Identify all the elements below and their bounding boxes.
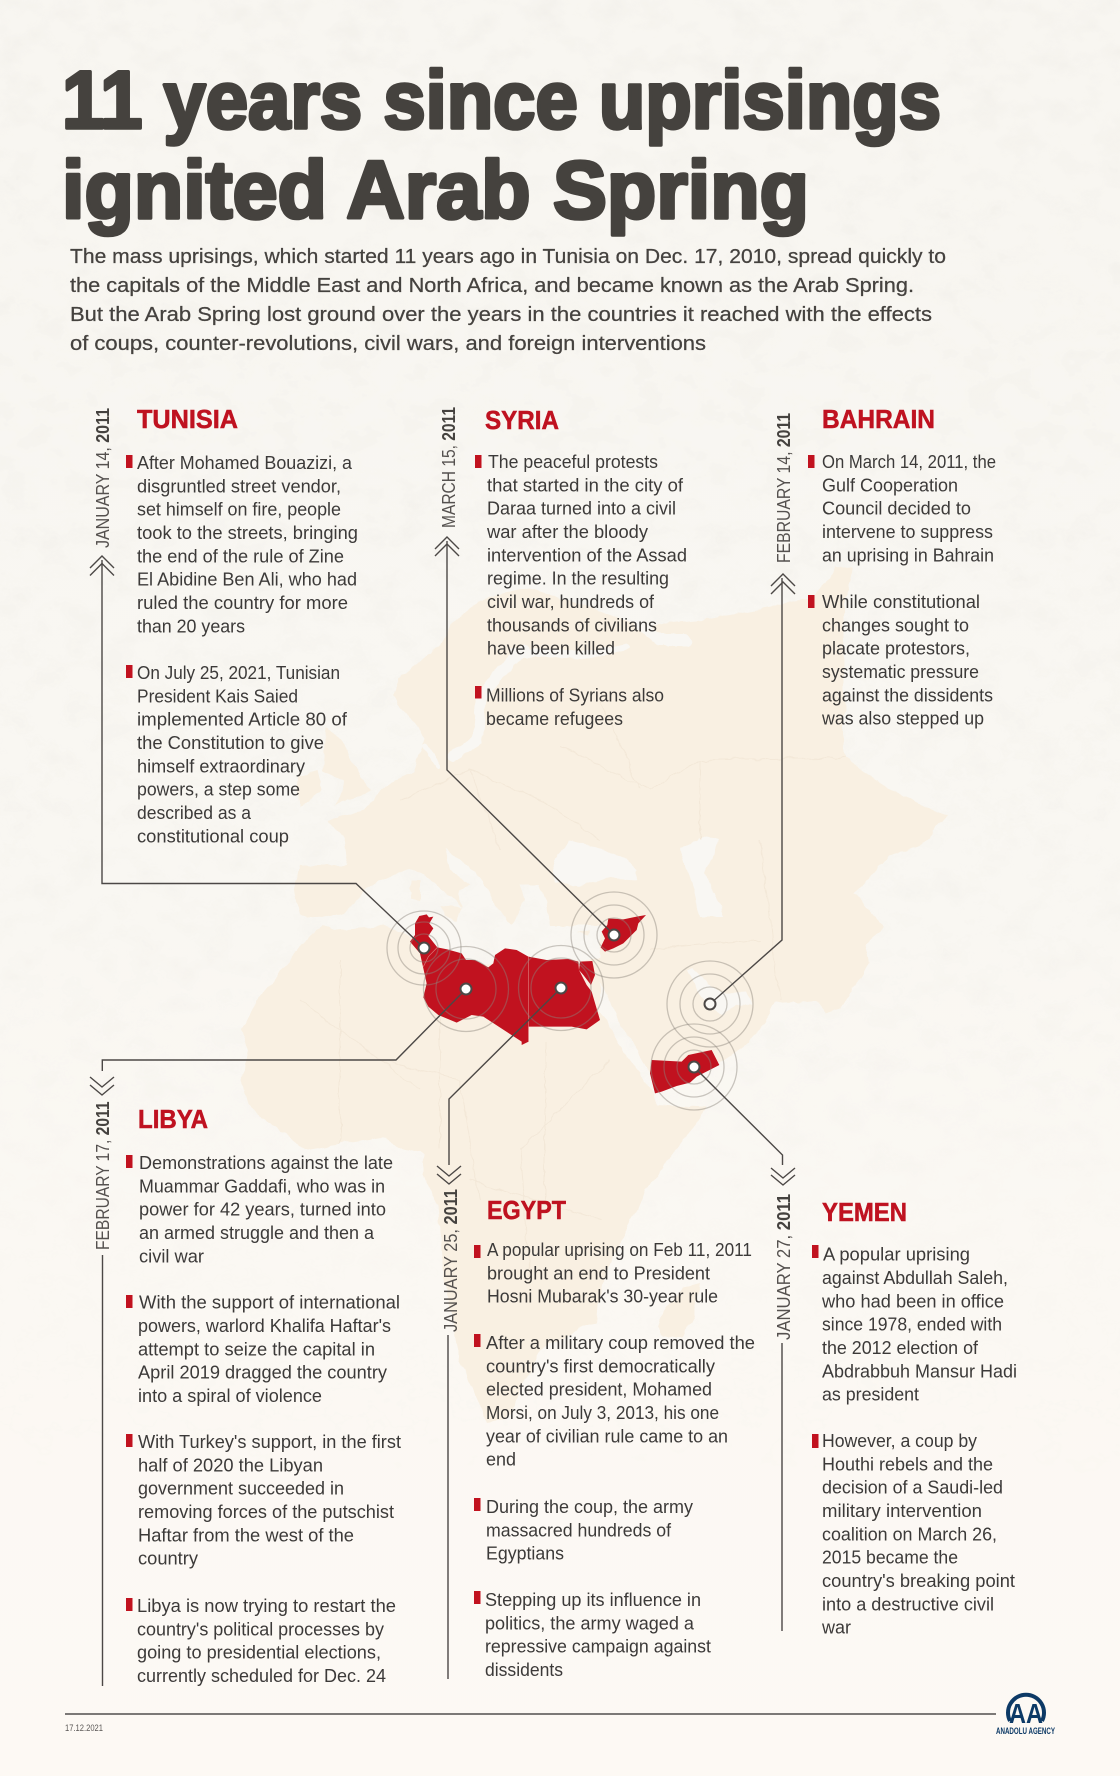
intro text: The mass uprisings, which started 11 years ago in Tunisia on Dec. 17, 2010, spread quickly to xyxy=(70,246,946,268)
text block: into a spiral of violence xyxy=(138,1385,322,1406)
text block: intervention of the Assad xyxy=(487,544,687,565)
text block: government succeeded in xyxy=(138,1478,344,1499)
text block: elected president, Mohamed xyxy=(486,1379,712,1400)
text block: repressive campaign against xyxy=(485,1636,711,1657)
text block: removing forces of the putschist xyxy=(138,1501,394,1522)
text block xyxy=(808,451,996,565)
text block: himself extraordinary xyxy=(137,755,306,776)
paper background xyxy=(11,0,1120,694)
text block: end xyxy=(486,1449,516,1470)
text block: since 1978, ended with xyxy=(822,1314,1002,1335)
text block: Demonstrations against the late xyxy=(139,1152,393,1173)
text block: changes sought to xyxy=(822,614,969,635)
text block: April 2019 dragged the country xyxy=(138,1362,388,1383)
arrow: Libya connector xyxy=(90,984,472,1686)
highlighted countries xyxy=(410,914,719,1093)
text block: powers, a step some xyxy=(137,779,300,800)
text block: civil war xyxy=(139,1245,204,1266)
text block xyxy=(126,1152,393,1266)
world map xyxy=(242,567,949,1423)
text block xyxy=(474,1239,752,1307)
text block xyxy=(812,1430,1015,1638)
text block xyxy=(474,1496,694,1564)
logo: Anadolu Agency: ANADOLU AGENCY xyxy=(996,1726,1055,1736)
panel: Yemen xyxy=(688,1062,1017,1638)
text block: as president xyxy=(822,1384,919,1405)
text block: Hosni Mubarak's 30-year rule xyxy=(487,1286,718,1307)
footer rule and date: 17.12.2021 xyxy=(65,1723,103,1733)
text block: 2015 became the xyxy=(822,1547,958,1568)
logo: Anadolu Agency: AA xyxy=(1009,1698,1043,1729)
text block xyxy=(474,1332,755,1470)
heading: BAHRAIN xyxy=(822,406,935,434)
text block: Morsi, on July 3, 2013, his one xyxy=(486,1402,719,1423)
text block: El Abidine Ben Ali, who had xyxy=(137,569,357,590)
text block: took to the streets, bringing xyxy=(137,522,358,543)
text block: an uprising in Bahrain xyxy=(822,544,994,565)
text block: than 20 years xyxy=(137,615,245,636)
arrow: Bahrain connector xyxy=(704,574,795,1010)
text block: decision of a Saudi-led xyxy=(822,1477,1003,1498)
text block: against Abdullah Saleh, xyxy=(822,1267,1008,1288)
arrow: Tunisia connector xyxy=(90,556,430,954)
title: 11 years since uprisings xyxy=(62,55,941,146)
text block: who had been in office xyxy=(821,1290,1004,1311)
text block: After a military coup removed the xyxy=(486,1332,755,1353)
text block: the end of the rule of Zine xyxy=(137,545,344,566)
text block xyxy=(126,452,358,636)
panel: Bahrain xyxy=(704,406,996,1010)
text block: placate protestors, xyxy=(822,638,970,659)
date: MARCH 15, 2011 xyxy=(438,407,459,528)
location rings xyxy=(387,892,753,1110)
text block: became refugees xyxy=(486,708,623,729)
text block xyxy=(126,1595,396,1686)
text block xyxy=(812,1244,1017,1405)
text block: constitutional coup xyxy=(137,825,289,846)
date: FEBRUARY 17, 2011 xyxy=(92,1102,113,1250)
text block: With Turkey's support, in the first xyxy=(138,1431,401,1452)
text block: Libya is now trying to restart the xyxy=(137,1595,396,1616)
text block: year of civilian rule came to an xyxy=(486,1425,728,1446)
text block: President Kais Saied xyxy=(137,685,298,706)
text block: Muammar Gaddafi, who was in xyxy=(139,1175,385,1196)
text block: power for 42 years, turned into xyxy=(139,1199,386,1220)
text block: attempt to seize the capital in xyxy=(138,1338,375,1359)
text block: implemented Article 80 of xyxy=(137,709,348,730)
text block xyxy=(126,1431,401,1569)
text block: half of 2020 the Libyan xyxy=(138,1454,323,1475)
text block: Stepping up its influence in xyxy=(485,1589,701,1610)
heading: YEMEN xyxy=(822,1199,907,1227)
heading: EGYPT xyxy=(487,1197,566,1225)
text block: that started in the city of xyxy=(487,474,684,495)
text block: regime. In the resulting xyxy=(487,568,669,589)
text block: thousands of civilians xyxy=(487,614,657,635)
text block: politics, the army waged a xyxy=(485,1612,695,1633)
text block: On July 25, 2021, Tunisian xyxy=(137,662,340,683)
text block: civil war, hundreds of xyxy=(487,591,655,612)
text block: Houthi rebels and the xyxy=(822,1453,993,1474)
text block xyxy=(126,662,348,846)
text block: Gulf Cooperation xyxy=(822,474,958,495)
text block xyxy=(475,451,687,659)
text block: disgruntled street vendor, xyxy=(137,475,341,496)
text block: country xyxy=(138,1548,199,1569)
intro text: of coups, counter-revolutions, civil wars, and foreign interventions xyxy=(70,333,706,355)
date: JANUARY 25, 2011 xyxy=(440,1189,461,1332)
title: ignited Arab Spring xyxy=(62,145,809,236)
text block: With the support of international xyxy=(139,1292,400,1313)
text block: massacred hundreds of xyxy=(486,1519,672,1540)
text block: the Constitution to give xyxy=(137,732,324,753)
heading: SYRIA xyxy=(485,407,559,435)
text block: coalition on March 26, xyxy=(822,1523,997,1544)
text block: systematic pressure xyxy=(822,661,979,682)
text block: powers, warlord Khalifa Haftar's xyxy=(138,1315,391,1336)
arrow: Syria connector xyxy=(435,537,620,940)
text block xyxy=(126,1292,400,1406)
text block: The peaceful protests xyxy=(488,451,658,472)
logo: Anadolu Agency xyxy=(996,1695,1055,1736)
text block: intervene to suppress xyxy=(822,521,993,542)
text block: war xyxy=(821,1617,851,1638)
text block: Egyptians xyxy=(486,1543,564,1564)
text block: have been killed xyxy=(487,638,615,659)
text block: an armed struggle and then a xyxy=(139,1222,375,1243)
text block: However, a coup by xyxy=(822,1430,978,1451)
text block: brought an end to President xyxy=(487,1262,710,1283)
text block xyxy=(474,1589,711,1680)
text block: described as a xyxy=(137,802,252,823)
text block: against the dissidents xyxy=(822,684,993,705)
text block: During the coup, the army xyxy=(486,1496,694,1517)
text block: After Mohamed Bouazizi, a xyxy=(137,452,353,473)
text block: Daraa turned into a civil xyxy=(487,498,676,519)
title xyxy=(62,55,941,236)
date: JANUARY 27, 2011 xyxy=(773,1194,794,1340)
text block: Abdrabbuh Mansur Hadi xyxy=(822,1360,1017,1381)
panel: Libya xyxy=(90,984,472,1686)
date: JANUARY 14, 2011 xyxy=(92,408,113,548)
text block: country's breaking point xyxy=(822,1570,1015,1591)
text block: was also stepped up xyxy=(821,708,984,729)
panel: Syria xyxy=(435,407,687,940)
text block: the 2012 election of xyxy=(822,1337,979,1358)
arrow: Yemen connector xyxy=(688,1062,795,1631)
text block: Haftar from the west of the xyxy=(138,1524,354,1545)
text block: country's first democratically xyxy=(486,1355,716,1376)
intro text xyxy=(70,246,946,355)
text block: going to presidential elections, xyxy=(137,1642,381,1663)
text block: While constitutional xyxy=(822,591,980,612)
text block: war after the bloody xyxy=(486,521,649,542)
text block: currently scheduled for Dec. 24 xyxy=(137,1665,386,1686)
text block xyxy=(475,685,664,729)
panel: Tunisia xyxy=(90,406,430,954)
text block: A popular uprising on Feb 11, 2011 xyxy=(487,1239,752,1260)
text block: On March 14, 2011, the xyxy=(822,451,996,472)
text block: ruled the country for more xyxy=(137,592,348,613)
arrow: Egypt connector xyxy=(437,982,566,1679)
text block: dissidents xyxy=(485,1659,563,1680)
heading: TUNISIA xyxy=(137,406,238,434)
text block: military intervention xyxy=(822,1500,982,1521)
text block: Council decided to xyxy=(822,498,971,519)
text block: A popular uprising xyxy=(823,1244,970,1265)
intro text: the capitals of the Middle East and North Africa, and became known as the Arab Spring. xyxy=(70,275,914,297)
text block: set himself on fire, people xyxy=(137,499,341,520)
intro text: But the Arab Spring lost ground over the years in the countries it reached with the effects xyxy=(70,304,932,326)
text block xyxy=(808,591,993,729)
text block: Millions of Syrians also xyxy=(486,685,664,706)
text block: into a destructive civil xyxy=(822,1593,994,1614)
panel: Egypt xyxy=(437,982,755,1680)
date: FEBRUARY 14, 2011 xyxy=(773,413,794,563)
heading: LIBYA xyxy=(138,1106,208,1134)
text block: country's political processes by xyxy=(137,1618,385,1639)
